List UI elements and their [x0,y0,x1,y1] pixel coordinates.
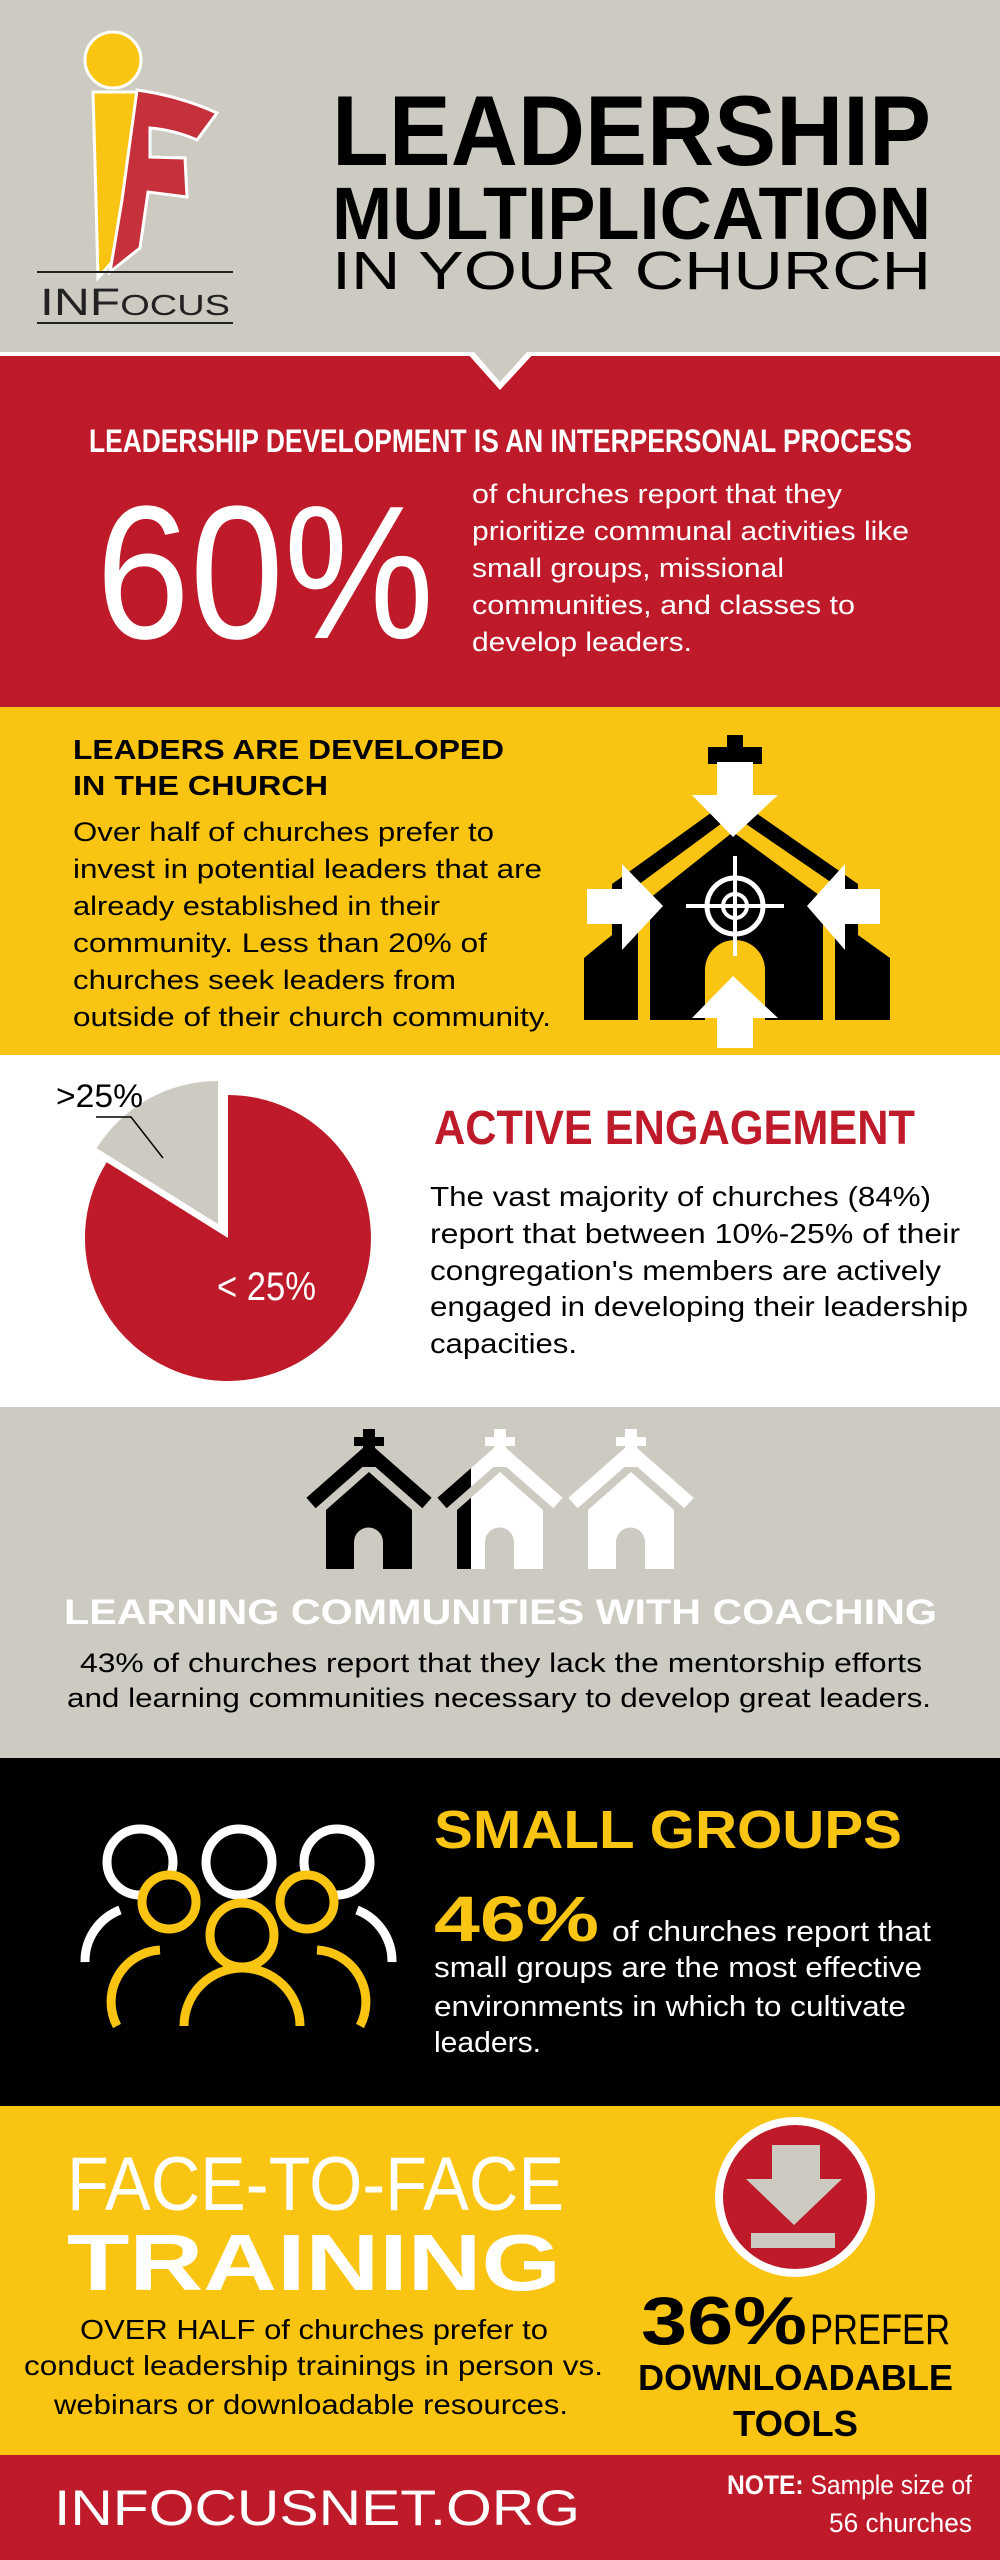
text block: of churches report that they [472,479,843,509]
title: MULTIPLICATION [332,172,931,255]
text block [434,1916,931,2059]
heading [73,734,504,801]
text block: prioritize communal activities like [472,516,909,546]
pie chart: >25% [56,1078,143,1114]
text block: of churches report that [612,1916,931,1948]
text block: conduct leadership trainings in person vs. [24,2350,603,2381]
icon: church with arrows and target [584,735,890,1048]
text block [67,1648,931,1713]
stat: 36% prefer downloadable tools: 36% [641,2283,807,2359]
stat: 46%: 46% [434,1883,599,1955]
text block: small groups, missional [472,553,784,583]
text block [73,817,551,1032]
text block: leaders. [434,2027,541,2059]
icon: three churches [311,1429,689,1569]
pie chart: < 25% [217,1265,316,1309]
text block: 43% of churches report that they lack the mentorship efforts [80,1648,922,1678]
logo [37,32,233,324]
panel: learning communities [0,1407,1000,1758]
text block: engaged in developing their leadership [430,1291,968,1322]
heading: LEADERS ARE DEVELOPED [73,734,504,765]
text block: webinars or downloadable resources. [53,2389,568,2420]
panel: active engagement [0,1055,1000,1407]
text block [472,479,909,657]
text block: already established in their [73,891,440,921]
stat: 36% prefer downloadable tools [638,2283,953,2444]
stat: 36% prefer downloadable tools: TOOLS [733,2403,858,2444]
heading: ACTIVE ENGAGEMENT [434,1102,915,1155]
text block [430,1181,968,1359]
stat: 36% prefer downloadable tools: PREFER [810,2306,950,2354]
panel: leaders developed in the church [0,707,1000,1055]
website: INFOCUSNET.ORG [54,2480,580,2536]
pie chart [56,1078,371,1381]
logo: IN FOCUS [40,282,230,324]
panel: small groups [0,1758,1000,2106]
note [727,2470,972,2538]
text block: Over half of churches prefer to [73,817,494,847]
heading: LEARNING COMMUNITIES WITH COACHING [64,1593,937,1632]
title: LEADERSHIP [332,75,931,186]
text block: report that between 10%-25% of their [430,1218,960,1249]
text block [24,2314,603,2420]
text block: The vast majority of churches (84%) [430,1181,931,1212]
panel: face-to-face training [0,2106,1000,2455]
text block: invest in potential leaders that are [73,854,542,884]
heading: TRAINING [67,2218,561,2307]
note: 56 churches [829,2508,972,2538]
text block: capacities. [430,1328,577,1359]
text block: churches seek leaders from [73,965,456,995]
icon: download [715,2117,875,2277]
heading: IN THE CHURCH [73,770,328,801]
text block: communities, and classes to [472,590,855,620]
text block: develop leaders. [472,627,692,657]
text block: and learning communities necessary to develop great leaders. [67,1683,931,1713]
panel: footer [0,2455,1000,2560]
icon: group of people [85,1829,392,2026]
panel: header [0,0,1000,356]
heading: SMALL GROUPS [434,1800,902,1860]
text block: congregation's members are actively [430,1255,941,1286]
note: NOTE: Sample size of [727,2470,972,2500]
title [332,75,931,301]
stat: 60%: 60% [96,467,434,679]
text block: outside of their church community. [73,1002,551,1032]
heading [67,2142,564,2307]
text block: environments in which to cultivate [434,1991,906,2023]
text block: community. Less than 20% of [73,928,488,958]
text block: OVER HALF of churches prefer to [80,2314,548,2345]
stat: 36% prefer downloadable tools: DOWNLOADABLE [638,2357,953,2398]
title: IN YOUR CHURCH [332,241,931,301]
heading: FACE-TO-FACE [67,2142,564,2227]
panel: interpersonal process [0,352,1000,707]
text block: small groups are the most effective [434,1952,922,1984]
